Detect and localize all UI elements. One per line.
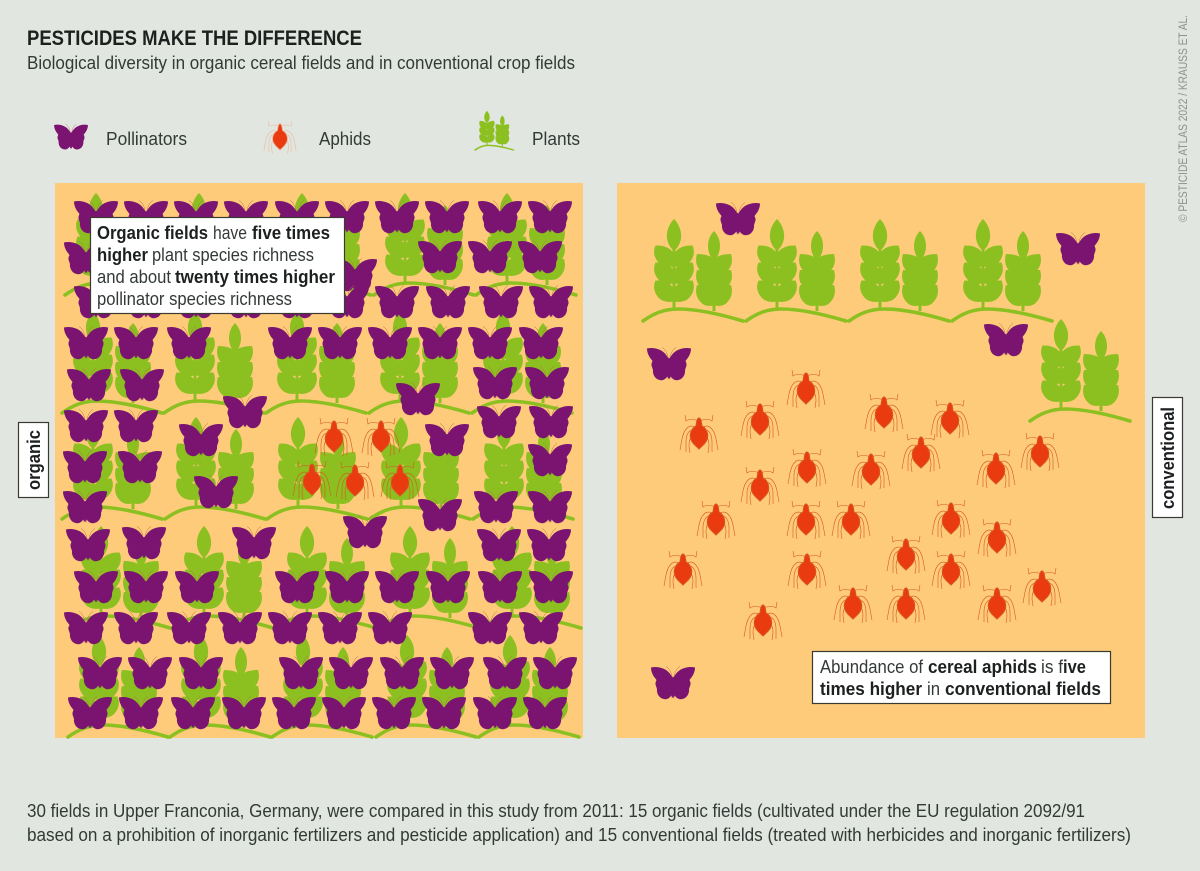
conventional plants	[643, 219, 1130, 421]
legend item: plants: Plants	[532, 129, 580, 149]
side label: organic	[18, 422, 48, 498]
organic field background	[55, 183, 583, 738]
callout: cereal aphids: conventional fields	[945, 679, 1101, 699]
callout: organic fields: higher	[97, 245, 148, 265]
callout: cereal aphids	[812, 652, 1110, 704]
conventional pollinators	[647, 202, 1100, 699]
legend item: aphids	[264, 121, 371, 153]
organic plants	[62, 193, 581, 737]
panel: conventional field	[617, 183, 1145, 738]
legend	[54, 111, 580, 153]
side label: organic: organic	[24, 430, 44, 490]
legend item: plants	[475, 111, 580, 150]
callout: organic fields: pollinator species richness	[97, 289, 292, 309]
callout: cereal aphids: cereal aphids	[928, 657, 1037, 677]
side label: conventional	[1152, 398, 1182, 518]
legend item: pollinators: Pollinators	[106, 129, 187, 149]
conventional field background	[617, 183, 1145, 738]
conventional aphids	[664, 370, 1061, 640]
callout: organic fields: five times	[252, 223, 330, 243]
footnote: 30 fields in Upper Franconia, Germany, were compared in this study from 2011: 15 organic fields (cultivated under the EU regulation 2092/91	[27, 801, 1085, 821]
footnote	[27, 801, 1131, 845]
organic aphids	[293, 418, 419, 500]
callout: cereal aphids: Abundance of	[820, 657, 924, 677]
callout: organic fields: have	[213, 223, 247, 243]
callout: organic fields: and about	[97, 267, 171, 287]
legend item: pollinators	[54, 124, 187, 150]
callout: organic fields: twenty times higher	[175, 267, 335, 287]
callout: organic fields	[90, 218, 344, 314]
callout: cereal aphids: times higher	[820, 679, 922, 699]
callout: organic fields: Organic fields	[97, 223, 208, 243]
title: PESTICIDES MAKE THE DIFFERENCE	[27, 27, 362, 50]
callout: cereal aphids: in	[927, 679, 940, 699]
organic pollinators	[63, 200, 577, 729]
callout: cereal aphids: ive	[1063, 657, 1086, 677]
subtitle: Biological diversity in organic cereal fields and in conventional crop fields	[27, 53, 575, 73]
legend item: aphids: Aphids	[319, 129, 371, 149]
callout: organic fields: plant species richness	[152, 245, 314, 265]
footnote: based on a prohibition of inorganic fertilizers and pesticide application) and 15 conventional fields (treated with herbicides and inorganic fertilizers)	[27, 825, 1131, 845]
panel: organic field	[55, 183, 583, 738]
callout: cereal aphids: is f	[1041, 657, 1064, 677]
side label: conventional: conventional	[1158, 407, 1178, 509]
